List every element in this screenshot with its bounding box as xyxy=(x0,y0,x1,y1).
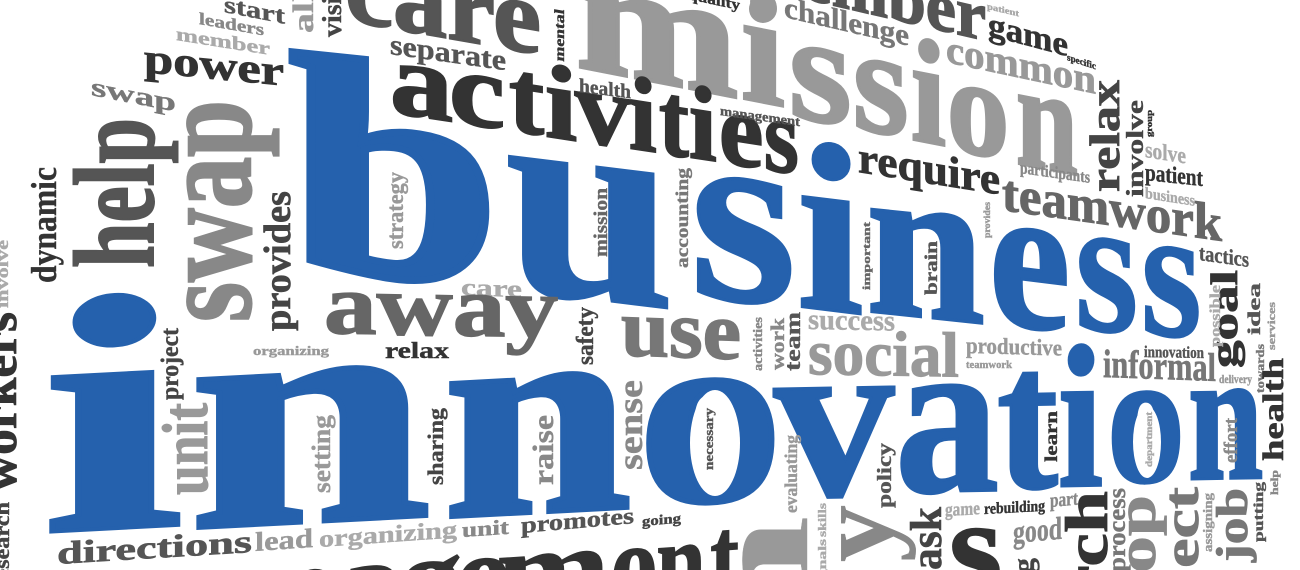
vertical word: goal: goal xyxy=(1204,270,1246,368)
vertical word: sharing: sharing xyxy=(423,408,448,485)
word: solve: solve xyxy=(1145,137,1186,169)
word: business small: business xyxy=(1145,185,1195,210)
word: game small: game xyxy=(945,498,980,521)
word: promotes: promotes xyxy=(521,502,634,538)
headline word: innovation: a xyxy=(895,288,999,541)
vertical word: safety: safety xyxy=(573,307,599,365)
headline word: innovation: o xyxy=(1107,311,1185,524)
word: activities: a xyxy=(390,19,453,145)
word: activities xyxy=(390,19,799,198)
word: organizing: organizing xyxy=(319,517,457,553)
word: activities: t xyxy=(659,61,689,181)
vertical word: raise: raise xyxy=(527,415,560,485)
word: activities: t xyxy=(509,37,544,158)
vertical word: mental: mental xyxy=(552,8,568,63)
headline word: business xyxy=(288,0,1202,381)
vertical word: necessary: necessary xyxy=(701,407,716,470)
headline word: business: e xyxy=(989,137,1070,377)
vertical word: policy: policy xyxy=(874,443,896,508)
word: good: good xyxy=(1013,510,1062,550)
word: patient: patient xyxy=(1145,160,1203,192)
vertical word: towards: towards xyxy=(1253,344,1267,393)
word: activities: e xyxy=(719,69,763,192)
vertical word: activities small: activities xyxy=(750,317,765,371)
vertical word: help small: help xyxy=(1270,469,1281,495)
word: member: member xyxy=(176,24,271,60)
word: activities: i xyxy=(545,43,577,165)
word: away: away xyxy=(324,256,558,356)
vertical word: relax: relax xyxy=(1083,80,1129,192)
vertical word: brain: brain xyxy=(921,241,941,295)
headline word: business: s xyxy=(690,64,796,363)
word: activities: s xyxy=(764,77,799,198)
vertical word: provides small: provides xyxy=(982,201,992,238)
headline word: innovation: t xyxy=(997,306,1058,532)
vertical word: involve: involve xyxy=(1123,100,1149,197)
vertical word: important: important xyxy=(861,222,873,290)
vertical word: effort: effort xyxy=(1221,417,1242,463)
word: innovation small: innovation xyxy=(1144,342,1204,362)
large word: mission xyxy=(576,0,1078,208)
vertical word: mission small: mission xyxy=(591,188,612,257)
word: directions: directions xyxy=(57,523,252,570)
vertical word: provides: provides xyxy=(257,191,299,331)
vertical word: project: project xyxy=(157,327,184,400)
word: swap small: swap xyxy=(91,72,176,117)
headline word: business: n xyxy=(866,114,985,372)
mission dot xyxy=(749,0,777,23)
large word: mission: o xyxy=(947,25,1009,190)
vertical word: setting: setting xyxy=(307,415,336,493)
vertical word: skills: skills xyxy=(815,503,829,537)
vertical word: swap: swap xyxy=(131,100,279,322)
vertical word: dynamic: dynamic xyxy=(24,167,64,283)
word: care small: care xyxy=(461,275,522,303)
word: health: health xyxy=(579,75,631,103)
vertical word: idea: idea xyxy=(1244,283,1264,335)
vertical word: strategy: strategy xyxy=(383,172,408,249)
vertical word: evaluating: evaluating xyxy=(781,435,801,513)
vertical word: y partial: y xyxy=(794,505,916,562)
headline word: business: s xyxy=(1141,166,1202,381)
vertical word: possible: possible xyxy=(1208,285,1224,347)
word: teamwork small: teamwork xyxy=(966,359,1013,371)
headline word: business: s xyxy=(1075,153,1138,378)
word: activities: v xyxy=(575,47,631,172)
word: informal: informal xyxy=(1103,341,1216,390)
vertical word: learn: learn xyxy=(1041,411,1061,462)
word: teamwork: teamwork xyxy=(1002,164,1222,253)
word: success: success xyxy=(808,304,895,338)
vertical word: health: health xyxy=(1257,358,1290,461)
word: organizing small: organizing xyxy=(253,343,330,358)
headline word: innovation: n xyxy=(1188,311,1263,520)
large word: mission: n xyxy=(1016,33,1078,208)
word: tactics: tactics xyxy=(1199,240,1249,272)
word: use: use xyxy=(621,282,741,377)
vertical word: sense: sense xyxy=(611,380,650,470)
vertical word: department: department xyxy=(1144,412,1154,467)
word: game: game xyxy=(988,6,1068,64)
vertical word: team: team xyxy=(780,312,805,371)
word: social: social xyxy=(808,317,959,391)
vertical word: group: group xyxy=(1145,109,1154,137)
headline word: business: u xyxy=(505,33,675,372)
vertical word: help: help xyxy=(51,118,178,268)
word: rebuilding: rebuilding xyxy=(984,498,1045,518)
word: common: common xyxy=(946,26,1096,103)
word: activities: i xyxy=(629,55,657,176)
vertical word: ask: ask xyxy=(902,506,951,570)
large word: mission: i xyxy=(911,7,946,178)
headline word: innovation: o xyxy=(638,271,783,559)
word: management small: management xyxy=(720,103,801,129)
word: going: going xyxy=(642,512,681,530)
headline word: business: i xyxy=(797,93,864,367)
vertical word: job: job xyxy=(1208,488,1257,563)
headline word: innovation xyxy=(41,226,1263,570)
word: productive: productive xyxy=(966,333,1062,361)
vertical word: assigning: assigning xyxy=(1200,492,1215,552)
vertical word: accounting: accounting xyxy=(672,168,692,268)
vertical word: unit: unit xyxy=(150,403,222,495)
word: activities: c xyxy=(449,28,505,153)
word: specific: specific xyxy=(1067,52,1097,73)
word: activities: i xyxy=(689,64,717,185)
word: patient small: patient xyxy=(987,1,1019,18)
word: power: power xyxy=(144,35,284,95)
word: unit small: unit xyxy=(462,515,509,542)
word: participants: participants xyxy=(1020,158,1090,187)
word: lead: lead xyxy=(255,523,313,557)
word: part: part xyxy=(1050,488,1078,512)
headline word: innovation: v xyxy=(774,287,895,547)
headline word: innovation: i xyxy=(1058,304,1103,530)
vertical word: services: services xyxy=(1267,302,1278,350)
headline word: business: b xyxy=(288,0,500,355)
vertical word: all: all xyxy=(287,0,320,33)
word: relax: relax xyxy=(385,338,450,363)
vertical word: process: process xyxy=(1104,488,1131,570)
word: require: require xyxy=(858,133,1000,204)
vertical word: putting: putting xyxy=(1252,482,1267,542)
word: delivery: delivery xyxy=(1219,372,1252,386)
word: separate: separate xyxy=(390,29,506,77)
vertical word: work: work xyxy=(768,317,789,370)
word: leaders: leaders xyxy=(199,9,264,40)
word: management xyxy=(70,490,739,570)
